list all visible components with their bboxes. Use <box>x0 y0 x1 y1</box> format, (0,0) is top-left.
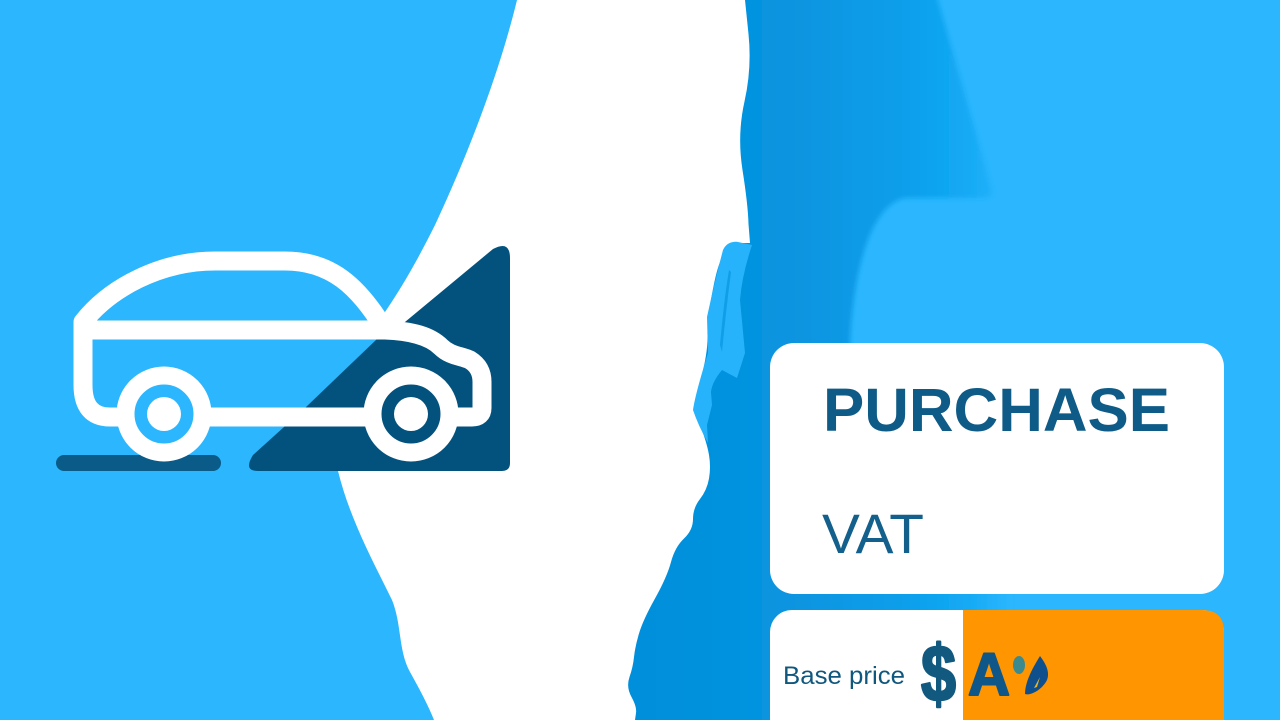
white central shape <box>338 0 750 720</box>
left wheel <box>126 376 202 452</box>
light blue sliver <box>693 242 752 443</box>
letter A: A <box>968 641 1010 708</box>
right wheel <box>372 376 450 452</box>
label: VAT: VAT <box>822 502 924 565</box>
icon: dollar sign: $ <box>921 629 956 718</box>
label: base price: Base price <box>783 662 905 690</box>
icon: percent marks <box>1013 656 1048 694</box>
orange segment <box>963 610 1224 720</box>
car outline <box>83 261 482 417</box>
ground line <box>56 455 221 471</box>
panel: price breakdown card <box>770 610 1224 720</box>
dark triangle <box>249 246 510 471</box>
deep blue band <box>620 0 1010 720</box>
car icon group <box>56 246 510 471</box>
panel: purchase VAT card <box>770 343 1224 594</box>
heading: purchase: PURCHASE <box>823 376 1170 444</box>
